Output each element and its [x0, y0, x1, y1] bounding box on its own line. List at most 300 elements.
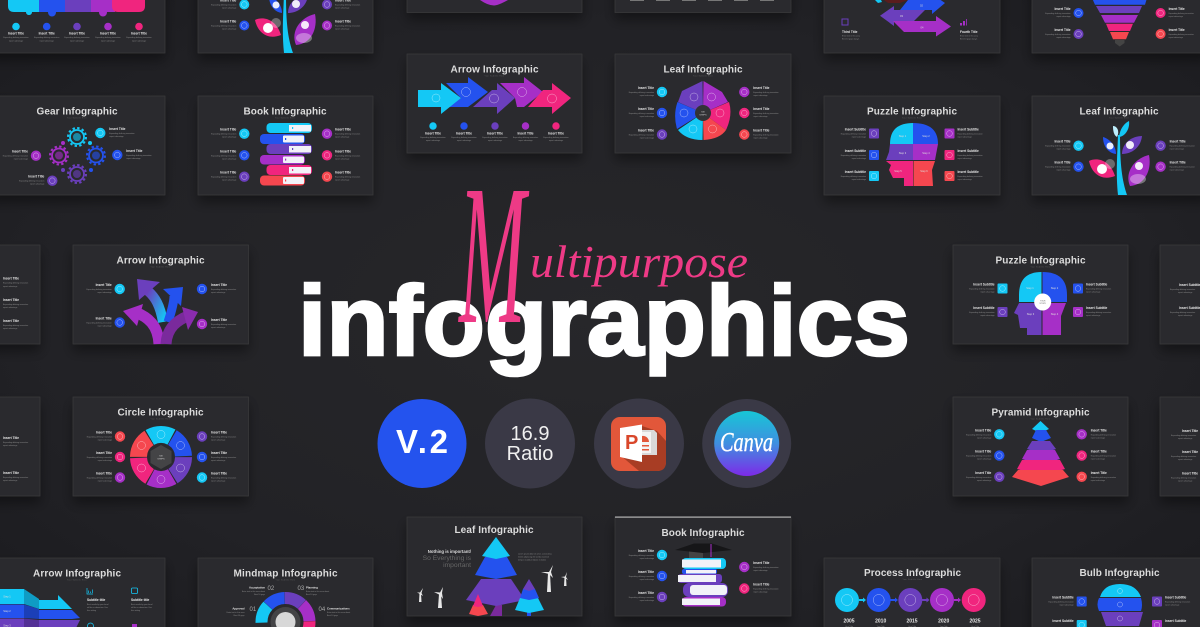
side items: Expanding defining innovation: [86, 288, 112, 291]
label 03: 03: [298, 586, 305, 592]
big tree: [466, 537, 525, 616]
subheading: Your Subtitle Here: [1031, 418, 1050, 421]
stub items: Insert Title: [3, 471, 19, 475]
heading: Arrow Infographic: [450, 65, 539, 76]
step items: Expanding defining innovation: [482, 136, 508, 139]
side items: Insert Subtitle: [958, 149, 979, 153]
side items: Insert Title: [638, 570, 654, 574]
side items: Expanding defining innovation: [629, 112, 654, 115]
subtitle block two: [131, 588, 152, 627]
side items: Insert Title: [1170, 161, 1186, 165]
side items: Insert Title: [220, 128, 237, 132]
side items: report advantage: [97, 291, 112, 294]
side items: Insert Title: [96, 283, 112, 287]
side items: Insert Title: [1091, 471, 1107, 475]
panel: Arrow Infographic curved: [73, 245, 248, 344]
leaf wheel: [675, 81, 730, 140]
step items: Expanding defining innovation: [95, 36, 121, 39]
badge: PowerPoint: P: [625, 432, 638, 454]
panel: Leaf Infographic top: [615, 54, 791, 153]
side items: report advantage: [958, 136, 972, 138]
side items: report advantage: [211, 326, 225, 329]
side items: Expanding defining innovation: [958, 132, 983, 136]
label 04: Enter text in this area about: [327, 611, 351, 614]
six piece head: [886, 123, 938, 186]
paragraph: Lorem ipsum dolor sit amet, consectetur,: [518, 552, 553, 556]
side items: Insert Title: [1054, 161, 1071, 165]
subheading: Your Subtitle Here: [903, 578, 922, 581]
third title: Best 10 guys always: [842, 38, 859, 41]
side items: Insert Title: [220, 149, 237, 153]
heading: Leaf Infographic: [664, 65, 743, 76]
step items: Insert Title: [39, 32, 55, 36]
panel: right stub upper: [1160, 245, 1200, 344]
side items: report advantage: [958, 157, 972, 160]
badge: Canva: [702, 399, 791, 488]
side items: Expanding defining innovation: [211, 154, 236, 157]
side items: Insert Title: [1054, 140, 1071, 144]
bulb: [1098, 584, 1143, 627]
side items: Expanding defining innovation: [1170, 145, 1195, 148]
side items: Insert Title: [1054, 28, 1071, 32]
step items: Insert Title: [456, 132, 472, 136]
four piece head: Step 3: [1027, 312, 1035, 316]
side items: report advantage: [753, 94, 768, 97]
highlighted top edge: [615, 516, 791, 518]
main title: infographics: [298, 265, 910, 376]
step items: report advantage: [549, 139, 563, 142]
script title: [458, 143, 748, 365]
side items: report advantage: [1086, 314, 1100, 317]
panel: Arrow Infographic top: [407, 54, 582, 153]
side items: report advantage: [753, 590, 768, 594]
arrows 02 03 04: 02: [920, 4, 923, 8]
label 03: Best 10 guys: [306, 593, 317, 596]
side items: report advantage: [98, 459, 112, 462]
pyramid layers: [1012, 421, 1069, 486]
badge: version: [378, 399, 466, 488]
panel: puzzle row top left: [0, 0, 165, 53]
side items: Expanding defining innovation: [629, 134, 654, 136]
side items: Expanding defining innovation: [86, 322, 112, 324]
panel: funnel top right: [1032, 0, 1200, 53]
label 01: Enter text in this area: [227, 611, 245, 614]
gears: [50, 128, 105, 183]
side items: report advantage: [640, 578, 654, 581]
badge: Canva: Canva: [720, 427, 773, 457]
side items: Expanding defining innovation: [1048, 600, 1074, 604]
wind turbines: [417, 565, 568, 608]
side items: Insert Title: [753, 582, 770, 586]
side items: report advantage: [1165, 604, 1179, 606]
step items: Insert Title: [425, 132, 441, 136]
step items: Expanding defining innovation: [543, 136, 569, 139]
segmented ring: STEPS: [157, 458, 165, 460]
stub items: Insert Title: [1182, 429, 1198, 433]
book stack: [260, 123, 312, 186]
panel: left stub lower: [0, 397, 40, 496]
side items: Expanding defining innovation: [19, 180, 44, 183]
side items: report advantage: [335, 6, 349, 10]
step items: report advantage: [426, 139, 440, 142]
side items: Insert Subtitle: [958, 128, 979, 132]
side items: Insert Title: [975, 450, 992, 454]
panel: Bulb Infographic: [1032, 558, 1200, 627]
side items: report advantage: [980, 290, 994, 294]
step items: report advantage: [488, 139, 502, 142]
step items: report advantage: [9, 40, 23, 42]
leaf wheel: STEPS: [699, 115, 707, 117]
side items: Insert Subtitle: [845, 170, 866, 174]
side items: Insert Title: [638, 128, 654, 132]
subheading: Your Subtitle Here: [902, 116, 922, 119]
stub items: [1170, 283, 1200, 317]
side items: [966, 428, 1116, 482]
side items: report advantage: [1091, 436, 1105, 439]
third title: Third Title: [842, 30, 858, 34]
side items: report advantage: [753, 115, 768, 118]
badge: ratio: 16.9: [511, 423, 549, 445]
heading: Arrow Infographic: [116, 256, 205, 267]
stub items: Expanding defining innovation: [1171, 455, 1196, 458]
step items: Insert Title: [131, 32, 147, 36]
stub items: report advantage: [3, 479, 17, 482]
years: 2020: [938, 618, 949, 624]
leaf wheel: SIX: [701, 112, 705, 114]
side items: report advantage: [852, 157, 866, 160]
side items: Insert Title: [753, 128, 770, 132]
label 01: Approval: [232, 606, 245, 610]
side items: report advantage: [30, 183, 44, 186]
side items: Expanding defining innovation: [753, 588, 779, 590]
side items: report advantage: [640, 115, 654, 118]
side items: Expanding defining innovation: [629, 554, 654, 557]
third title: Enter text in this area: [842, 35, 861, 38]
side items: report advantage: [126, 157, 141, 160]
panel: direction arrows top: [824, 0, 1000, 53]
side items: Insert Title: [1091, 450, 1107, 454]
side items: report advantage: [640, 136, 654, 140]
subtitle block two: will be a subsection. Use: [131, 606, 152, 609]
side items: [629, 86, 779, 140]
stub items: Expanding defining innovation: [3, 324, 28, 327]
side items: Insert Title: [28, 175, 45, 179]
side items: report advantage: [211, 438, 225, 442]
stub items: report advantage: [1178, 437, 1192, 440]
step items: Insert Title: [517, 132, 534, 136]
side items: report advantage: [640, 599, 654, 602]
heading: Book Infographic: [244, 107, 327, 118]
side items: Insert Title: [335, 171, 351, 175]
side items: report advantage: [98, 438, 112, 442]
stub items: Expanding defining innovation: [3, 303, 28, 306]
step items: Insert Title: [69, 32, 85, 36]
step items: Insert Title: [487, 132, 503, 136]
side items: [211, 128, 360, 182]
side items: Insert Title: [335, 20, 351, 24]
heading: Mindmap Infographic: [234, 569, 338, 580]
side items: report advantage: [98, 480, 112, 482]
heading: Pyramid Infographic: [992, 408, 1090, 419]
step items: Expanding defining innovation: [64, 36, 90, 39]
step items: Insert Title: [100, 32, 116, 36]
side items: Insert Subtitle: [1052, 619, 1074, 623]
stub items: Expanding defining innovation: [1170, 311, 1195, 314]
side items: Insert Subtitle: [845, 149, 866, 153]
tagline: [423, 549, 472, 569]
side items: Insert Subtitle: [845, 128, 866, 132]
badge: version: V.2: [396, 423, 448, 460]
side items: report advantage: [222, 157, 236, 160]
four piece head: STORY: [1039, 303, 1047, 305]
stub items: report advantage: [1178, 480, 1192, 482]
heading: Book Infographic: [662, 528, 745, 539]
folded step arrows: Step 1: [3, 594, 11, 598]
subtitle block two: this setting: [131, 609, 140, 612]
side items: Expanding defining innovation: [629, 91, 654, 94]
six piece head: Step 1: [899, 134, 907, 138]
side items: Expanding defining innovation: [1169, 33, 1194, 36]
panel: top center right: [615, 0, 791, 12]
side items: [1048, 596, 1190, 627]
side items: Expanding defining innovation: [966, 476, 991, 479]
side items: Insert Subtitle: [973, 306, 995, 310]
subtitle block one: will be a subsection. Use: [87, 606, 108, 609]
heading: Process Infographic: [864, 568, 961, 579]
segmented ring: SIX: [159, 456, 163, 458]
side items: Insert Title: [220, 20, 237, 24]
side items: Expanding defining innovation: [211, 456, 236, 459]
side items: Insert Subtitle: [1086, 306, 1107, 310]
side items: Insert Title: [1169, 7, 1185, 11]
panel: leaf top: [198, 0, 373, 53]
side items: Expanding defining innovation: [211, 4, 236, 6]
side items: Insert Subtitle: [1052, 596, 1074, 600]
side items: report advantage: [335, 157, 349, 160]
subheading: Your Subtitle Here: [276, 579, 295, 582]
heading: Arrow Infographic: [33, 569, 121, 580]
heading: Bulb Infographic: [1080, 568, 1160, 579]
side items: Expanding defining innovation: [1045, 145, 1070, 148]
side items: report advantage: [97, 324, 112, 328]
panel: Mindmap Infographic: [198, 558, 373, 627]
stub items: report advantage: [1178, 291, 1192, 294]
subheading: Your Subtitle Here: [1109, 116, 1129, 119]
subtitle block one: Subtitle title: [87, 598, 105, 602]
arrows 02 03 04: 03: [900, 14, 903, 18]
side items: Expanding defining innovation: [211, 24, 236, 28]
heading: Leaf Infographic: [454, 525, 534, 536]
badge: PowerPoint: [594, 398, 684, 488]
side items: report advantage: [1086, 290, 1100, 294]
small tree right: [515, 579, 544, 616]
panel: Arrow Infographic stacked: [0, 558, 165, 627]
stub items: Insert Subtitle: [1179, 306, 1200, 310]
subtitle block one: [87, 588, 108, 627]
folded step arrows: Step 2: [3, 609, 11, 613]
side items: Insert Title: [211, 472, 227, 476]
side items: Expanding defining innovation: [753, 566, 779, 569]
label 02: [242, 586, 275, 596]
side items: Expanding defining innovation: [126, 154, 152, 157]
side items: Insert Title: [220, 171, 237, 175]
side items: report advantage: [1170, 169, 1184, 172]
side items: report advantage: [211, 459, 225, 462]
subtitle block one: Best results by your hand: [87, 603, 108, 606]
purple shape: [480, 0, 508, 6]
stub items: Expanding defining innovation: [1171, 434, 1196, 437]
side items: Expanding defining innovation: [1045, 12, 1070, 15]
subtitle block one: this setting: [87, 609, 96, 612]
panel: Circle Infographic: [73, 397, 248, 496]
label 04: Communications: [327, 606, 350, 610]
heading: Gear Infographic: [36, 107, 118, 118]
step items: report advantage: [457, 139, 471, 142]
third title: [842, 19, 861, 41]
side items: Expanding defining innovation: [109, 132, 135, 135]
side items: report advantage: [222, 136, 236, 139]
four piece head: Step 4: [1051, 312, 1059, 316]
side items: Expanding defining innovation: [1169, 12, 1194, 15]
panel: Leaf Infographic plant right: [1032, 96, 1200, 195]
stub items: report advantage: [1178, 314, 1192, 317]
panel: left stub upper: [0, 245, 40, 344]
side items: Insert Subtitle: [1165, 619, 1186, 623]
side items: report advantage: [1059, 604, 1074, 606]
side items: Expanding defining innovation: [335, 24, 360, 28]
subheading: Your Subtitle Here: [67, 579, 87, 582]
side items: Insert Title: [96, 430, 112, 434]
side items: Expanding defining innovation: [958, 175, 983, 178]
six piece head: Step 2: [922, 134, 930, 138]
stub items: [3, 276, 28, 330]
side items: report advantage: [958, 178, 972, 181]
side items: Insert Title: [211, 283, 227, 287]
side items: report advantage: [1091, 479, 1105, 482]
subtitle block two: Subtitle title: [131, 598, 149, 602]
side items: Expanding defining innovation: [966, 455, 991, 458]
heading: Puzzle Infographic: [867, 106, 957, 118]
side items: Insert Title: [12, 150, 28, 154]
tagline: important: [443, 562, 471, 569]
panel: Process Infographic: [824, 558, 1000, 627]
side items: Insert Title: [638, 549, 654, 553]
stub items: report advantage: [3, 306, 17, 309]
panel: Book Infographic: [198, 96, 373, 195]
side items: report advantage: [977, 458, 991, 461]
side items: Insert Title: [753, 107, 770, 111]
side items: report advantage: [222, 6, 236, 10]
side items: report advantage: [109, 135, 124, 138]
heading: Circle Infographic: [118, 408, 204, 419]
side items: report advantage: [1056, 36, 1070, 39]
small tree left: [469, 594, 488, 616]
stub items: Expanding defining innovation: [3, 476, 28, 479]
subheading: Your Subtitle Here: [1031, 265, 1050, 268]
side items: Expanding defining innovation: [969, 311, 994, 314]
six piece head: Step 5: [894, 169, 902, 173]
years: 2015: [906, 618, 918, 624]
side items: Expanding defining innovation: [1091, 433, 1116, 436]
side items: report advantage: [640, 94, 654, 97]
side items: report advantage: [1056, 15, 1070, 18]
stub items: Expanding defining innovation: [3, 441, 28, 444]
side items: Expanding defining innovation: [753, 134, 779, 136]
side items: Insert Title: [109, 127, 126, 131]
four piece head: YOUR: [1040, 300, 1046, 302]
label 03: Planning: [306, 586, 318, 590]
side items: Insert Title: [96, 451, 112, 455]
step items: Insert Title: [8, 32, 24, 36]
side items: Expanding defining innovation: [211, 436, 236, 438]
side items: Expanding defining innovation: [1170, 166, 1195, 169]
side items: [211, 0, 360, 30]
step items: report advantage: [132, 40, 146, 42]
side items: report advantage: [753, 569, 768, 572]
badge: ratio: Ratio: [507, 443, 553, 465]
step items: Expanding defining innovation: [126, 36, 152, 39]
side items: Expanding defining innovation: [335, 176, 360, 179]
subheading: Your Subtitle Here: [693, 538, 713, 541]
chain of arrows: [418, 77, 571, 114]
side items: Expanding defining innovation: [1045, 33, 1070, 36]
step items: report advantage: [101, 40, 115, 42]
side items: Expanding defining innovation: [1165, 600, 1190, 604]
stub items: report advantage: [3, 285, 17, 288]
side items: report advantage: [852, 136, 866, 138]
stub items: report advantage: [3, 327, 17, 330]
subtitle block two: Best results by your hand: [131, 603, 152, 606]
side items: Expanding defining innovation: [1086, 288, 1111, 290]
stub items: Insert Title: [1182, 450, 1198, 454]
step items: report advantage: [518, 139, 533, 142]
side items: Expanding defining innovation: [841, 154, 866, 157]
stub items: Insert Title: [3, 276, 19, 280]
subheading: Your Subtitle Here: [151, 266, 170, 269]
side items: report advantage: [753, 136, 768, 140]
side items: Expanding defining innovation: [1086, 311, 1111, 314]
subheading: Your Subtitle Here: [275, 117, 295, 120]
subheading: Your Subtitle Here: [1110, 578, 1129, 581]
tagline: So Everything is: [423, 555, 472, 562]
side items: Expanding defining innovation: [211, 133, 236, 136]
panel: right stub lower: [1160, 397, 1200, 496]
side items: Expanding defining innovation: [1091, 455, 1116, 458]
subheading: Your Subtitle Here: [151, 418, 170, 421]
inverted pyramid: [1092, 0, 1147, 46]
side items: report advantage: [211, 291, 225, 294]
side items: Expanding defining innovation: [966, 433, 991, 436]
six piece head: Step 3: [899, 151, 907, 155]
side items: Insert Title: [211, 430, 227, 434]
stub items: [3, 436, 28, 482]
heading: Leaf Infographic: [1080, 106, 1159, 118]
fourth title: Enter text in this area: [960, 35, 979, 38]
side items: report advantage: [977, 479, 991, 482]
side items: report advantage: [222, 179, 236, 182]
side items: report advantage: [640, 557, 654, 560]
stub items: report advantage: [1178, 458, 1192, 461]
label 04: 04: [318, 607, 326, 613]
semicircle map: [252, 588, 319, 627]
small captions: [630, 0, 774, 1]
stub items: Insert Subtitle: [1179, 283, 1200, 287]
arrows 02 03 04: 04: [921, 26, 924, 30]
side items: Expanding defining innovation: [629, 596, 654, 599]
side items: Expanding defining innovation: [969, 288, 994, 290]
label 02: 02: [268, 586, 275, 592]
panel: Leaf Infographic trees: [407, 517, 582, 616]
